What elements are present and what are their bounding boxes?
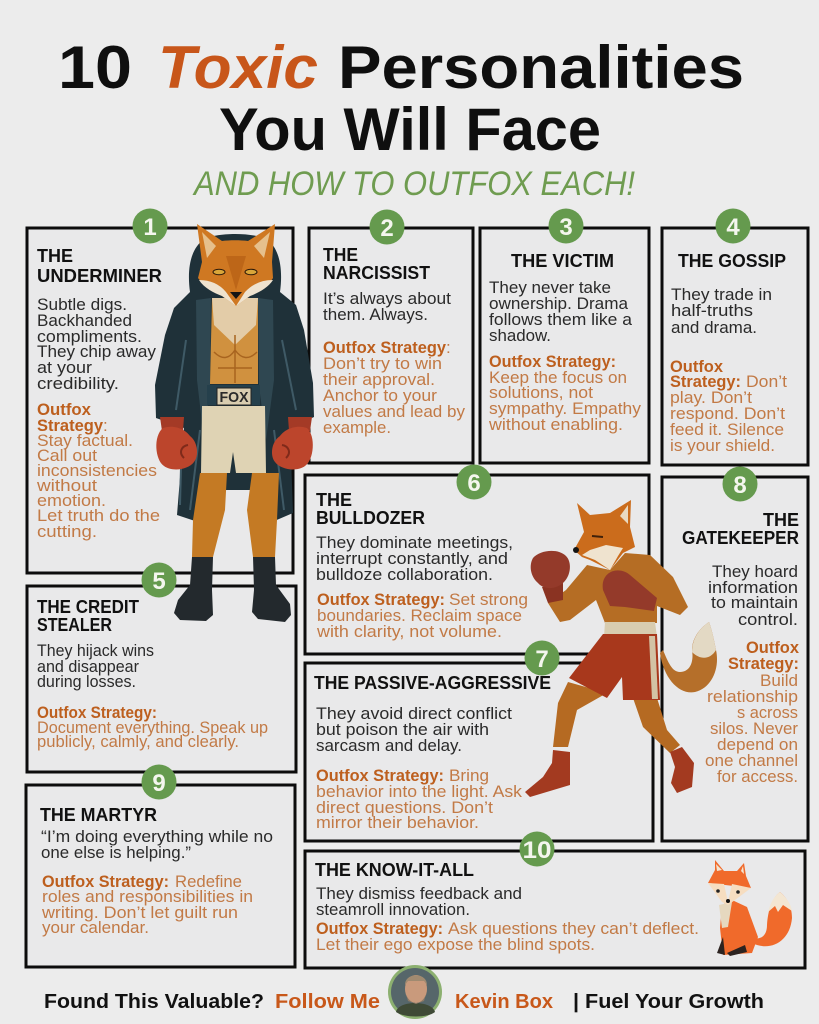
description: during losses. bbox=[37, 672, 136, 691]
strategy: play. Don’t bbox=[670, 388, 752, 407]
badge 5 bbox=[142, 562, 176, 598]
panel: 2 the narcissist bbox=[309, 228, 473, 463]
strategy: one channel bbox=[705, 751, 798, 770]
strategy: respond. Don’t bbox=[670, 404, 785, 423]
strategy: Bring bbox=[449, 766, 489, 785]
description: They chip away bbox=[37, 342, 156, 361]
strategy: Strategy: bbox=[728, 654, 799, 673]
strategy: your calendar. bbox=[42, 918, 149, 937]
description: steamroll innovation. bbox=[316, 900, 470, 919]
heading: NARCISSIST bbox=[323, 263, 430, 283]
strategy: Outfox Strategy: bbox=[42, 872, 169, 891]
strategy: Keep the focus on bbox=[489, 368, 627, 387]
heading bbox=[37, 246, 162, 286]
badge 2: 2 bbox=[380, 215, 394, 242]
heading: THE GOSSIP bbox=[678, 251, 786, 271]
strategy: Strategy: bbox=[670, 372, 741, 391]
strategy bbox=[488, 352, 642, 434]
strategy: sympathy. Empathy bbox=[489, 399, 642, 418]
description bbox=[708, 562, 798, 629]
panel: 3 the victim bbox=[480, 228, 649, 463]
heading: THE MARTYR bbox=[40, 805, 157, 825]
description: and disappear bbox=[37, 657, 139, 676]
heading: THE bbox=[316, 490, 352, 510]
badge 7: 7 bbox=[535, 646, 549, 673]
panel: 10 the know-it-all bbox=[305, 851, 805, 968]
strategy: Don’t bbox=[746, 372, 787, 391]
strategy: Anchor to your bbox=[323, 386, 437, 405]
badge 5: 5 bbox=[152, 568, 166, 595]
footer: Follow Me bbox=[275, 991, 380, 1013]
description: They hijack wins bbox=[37, 641, 154, 660]
strategy bbox=[323, 338, 465, 437]
strategy: Stay factual. bbox=[37, 431, 133, 450]
strategy bbox=[36, 400, 160, 541]
description: interrupt constantly, and bbox=[316, 549, 508, 568]
strategy: feed it. Silence bbox=[670, 420, 784, 439]
description: and drama. bbox=[671, 318, 757, 337]
strategy bbox=[37, 703, 268, 751]
heading: GATEKEEPER bbox=[682, 528, 799, 548]
illustration: boxing fox bbox=[525, 500, 717, 797]
strategy bbox=[316, 590, 528, 641]
strategy: mirror their behavior. bbox=[316, 813, 479, 832]
badge 1: 1 bbox=[143, 214, 157, 241]
strategy: is your shield. bbox=[670, 436, 775, 455]
badge 4: 4 bbox=[726, 214, 740, 241]
description: They never take bbox=[489, 278, 611, 297]
heading: THE bbox=[323, 245, 358, 265]
description: them. Always. bbox=[323, 305, 428, 324]
illustration: standing fox in robe bbox=[155, 224, 314, 622]
strategy: without enabling. bbox=[488, 415, 623, 434]
description: bulldoze collaboration. bbox=[316, 565, 493, 584]
badge 4 bbox=[716, 208, 750, 244]
strategy: with clarity, not volume. bbox=[316, 622, 502, 641]
title: Personalities bbox=[338, 34, 744, 101]
strategy: values and lead by bbox=[323, 402, 465, 421]
description bbox=[41, 827, 273, 862]
badge 9 bbox=[142, 764, 176, 800]
description: Backhanded bbox=[37, 311, 132, 330]
strategy: Let truth do the bbox=[37, 506, 160, 525]
description bbox=[37, 641, 154, 691]
panel: 4 the gossip bbox=[662, 228, 808, 465]
strategy: Ask questions they can’t deflect. bbox=[448, 919, 699, 938]
strategy: Redefine bbox=[175, 872, 242, 891]
strategy: Outfox bbox=[670, 357, 724, 376]
heading: THE PASSIVE-AGGRESSIVE bbox=[314, 673, 551, 693]
badge 10 bbox=[520, 832, 554, 866]
badge 8: 8 bbox=[733, 472, 747, 499]
strategy bbox=[41, 872, 253, 937]
avatar bbox=[388, 965, 442, 1019]
strategy: direct questions. Don’t bbox=[316, 798, 493, 817]
strategy: solutions, not bbox=[489, 383, 593, 402]
strategy: depend on bbox=[717, 735, 798, 754]
strategy: Outfox bbox=[746, 638, 800, 657]
strategy: Outfox Strategy: bbox=[316, 919, 443, 938]
strategy: writing. Don’t let guilt run bbox=[41, 903, 238, 922]
footer bbox=[44, 965, 764, 1019]
description: at your bbox=[37, 358, 92, 377]
description bbox=[316, 884, 522, 919]
description: They dismiss feedback and bbox=[316, 884, 522, 903]
strategy: Strategy bbox=[37, 416, 104, 435]
badge 10: 10 bbox=[522, 837, 552, 864]
description: They avoid direct conflict bbox=[316, 704, 512, 723]
strategy: for access. bbox=[717, 767, 798, 786]
panel: 9 the martyr bbox=[26, 785, 295, 967]
panel: 5 the credit stealer bbox=[27, 586, 296, 772]
footer: Found This Valuable? bbox=[44, 991, 264, 1013]
strategy: emotion. bbox=[37, 491, 106, 510]
strategy: Outfox Strategy: bbox=[37, 703, 157, 722]
description: “I’m doing everything while no bbox=[41, 827, 273, 846]
badge 1 bbox=[132, 208, 168, 244]
strategy bbox=[316, 919, 699, 954]
title bbox=[58, 34, 744, 163]
heading: THE KNOW-IT-ALL bbox=[315, 860, 474, 880]
strategy: Let their ego expose the blind spots. bbox=[316, 935, 595, 954]
description: information bbox=[708, 578, 798, 597]
subtitle: AND HOW TO OUTFOX EACH! bbox=[192, 165, 635, 203]
strategy: roles and responsibilities in bbox=[42, 887, 253, 906]
strategy: relationship bbox=[707, 687, 798, 706]
description: half-truths bbox=[671, 301, 753, 320]
strategy: boundaries. Reclaim space bbox=[317, 606, 522, 625]
description: control. bbox=[738, 610, 798, 629]
title: 10 bbox=[58, 34, 132, 101]
heading: BULLDOZER bbox=[316, 508, 425, 528]
strategy: Outfox Strategy: bbox=[489, 352, 616, 371]
badge 8 bbox=[722, 466, 758, 502]
strategy: cutting. bbox=[37, 522, 97, 541]
badge 9: 9 bbox=[152, 770, 166, 797]
heading: UNDERMINER bbox=[37, 266, 162, 286]
badge 3 bbox=[548, 208, 584, 244]
panel: 6 the bulldozer bbox=[305, 475, 649, 654]
description bbox=[671, 285, 772, 337]
heading bbox=[316, 490, 425, 528]
heading: THE bbox=[37, 246, 73, 266]
strategy: Don’t try to win bbox=[323, 354, 442, 373]
title: You Will Face bbox=[219, 96, 601, 163]
illustration: standing fox in robe: FOX bbox=[220, 389, 248, 406]
description bbox=[316, 704, 512, 755]
description: follows them like a bbox=[489, 310, 633, 329]
strategy: Set strong bbox=[449, 590, 528, 609]
description bbox=[489, 278, 633, 345]
strategy: Call out bbox=[37, 446, 97, 465]
description bbox=[323, 289, 451, 324]
strategy: example. bbox=[323, 418, 391, 437]
footer: | Fuel Your Growth bbox=[573, 991, 764, 1013]
strategy: s across bbox=[737, 703, 798, 722]
description: It’s always about bbox=[323, 289, 451, 308]
description bbox=[316, 533, 513, 584]
strategy: Document everything. Speak up bbox=[37, 718, 268, 737]
description bbox=[37, 295, 156, 393]
strategy: their approval. bbox=[323, 370, 435, 389]
heading: THE VICTIM bbox=[511, 251, 614, 271]
badge 7 bbox=[524, 640, 560, 676]
badge 6: 6 bbox=[467, 470, 481, 497]
strategy: behavior into the light. Ask bbox=[316, 782, 523, 801]
heading: THE bbox=[763, 510, 799, 530]
strategy: Outfox bbox=[37, 400, 92, 419]
badge 6 bbox=[456, 464, 492, 500]
description: compliments. bbox=[37, 327, 142, 346]
description: They hoard bbox=[712, 562, 798, 581]
description: They trade in bbox=[671, 285, 772, 304]
panel: 8 the gatekeeper bbox=[662, 477, 808, 841]
strategy: Outfox Strategy: bbox=[317, 590, 445, 609]
heading: STEALER bbox=[37, 615, 112, 635]
strategy: without bbox=[36, 476, 97, 495]
heading bbox=[37, 597, 139, 635]
badge 3: 3 bbox=[559, 214, 573, 241]
strategy: : bbox=[103, 416, 108, 435]
illustration: small sitting fox bbox=[708, 860, 792, 956]
title: Toxic bbox=[158, 34, 318, 101]
description: to maintain bbox=[711, 593, 798, 612]
strategy bbox=[705, 638, 800, 786]
badge 2 bbox=[370, 210, 404, 244]
description: They dominate meetings, bbox=[316, 533, 513, 552]
strategy: Outfox Strategy bbox=[323, 338, 447, 357]
strategy: : bbox=[446, 338, 451, 357]
description: shadow. bbox=[489, 326, 551, 345]
description: sarcasm and delay. bbox=[316, 736, 462, 755]
heading: THE CREDIT bbox=[37, 597, 139, 617]
strategy bbox=[670, 357, 787, 455]
description: ownership. Drama bbox=[489, 294, 629, 313]
strategy: inconsistencies bbox=[37, 461, 157, 480]
description: credibility. bbox=[37, 374, 119, 393]
description: Subtle digs. bbox=[37, 295, 127, 314]
strategy bbox=[316, 766, 523, 832]
strategy: Build bbox=[760, 671, 798, 690]
footer: Kevin Box bbox=[455, 991, 553, 1013]
heading bbox=[323, 245, 430, 283]
panel: 1 the underminer bbox=[27, 228, 293, 573]
panel: 7 the passive-aggressive bbox=[305, 663, 653, 841]
strategy: publicly, calmly, and clearly. bbox=[37, 732, 239, 751]
strategy: silos. Never bbox=[710, 719, 798, 738]
description: but poison the air with bbox=[316, 720, 489, 739]
heading bbox=[682, 510, 799, 548]
strategy: Outfox Strategy: bbox=[316, 766, 444, 785]
description: one else is helping.” bbox=[41, 843, 191, 862]
